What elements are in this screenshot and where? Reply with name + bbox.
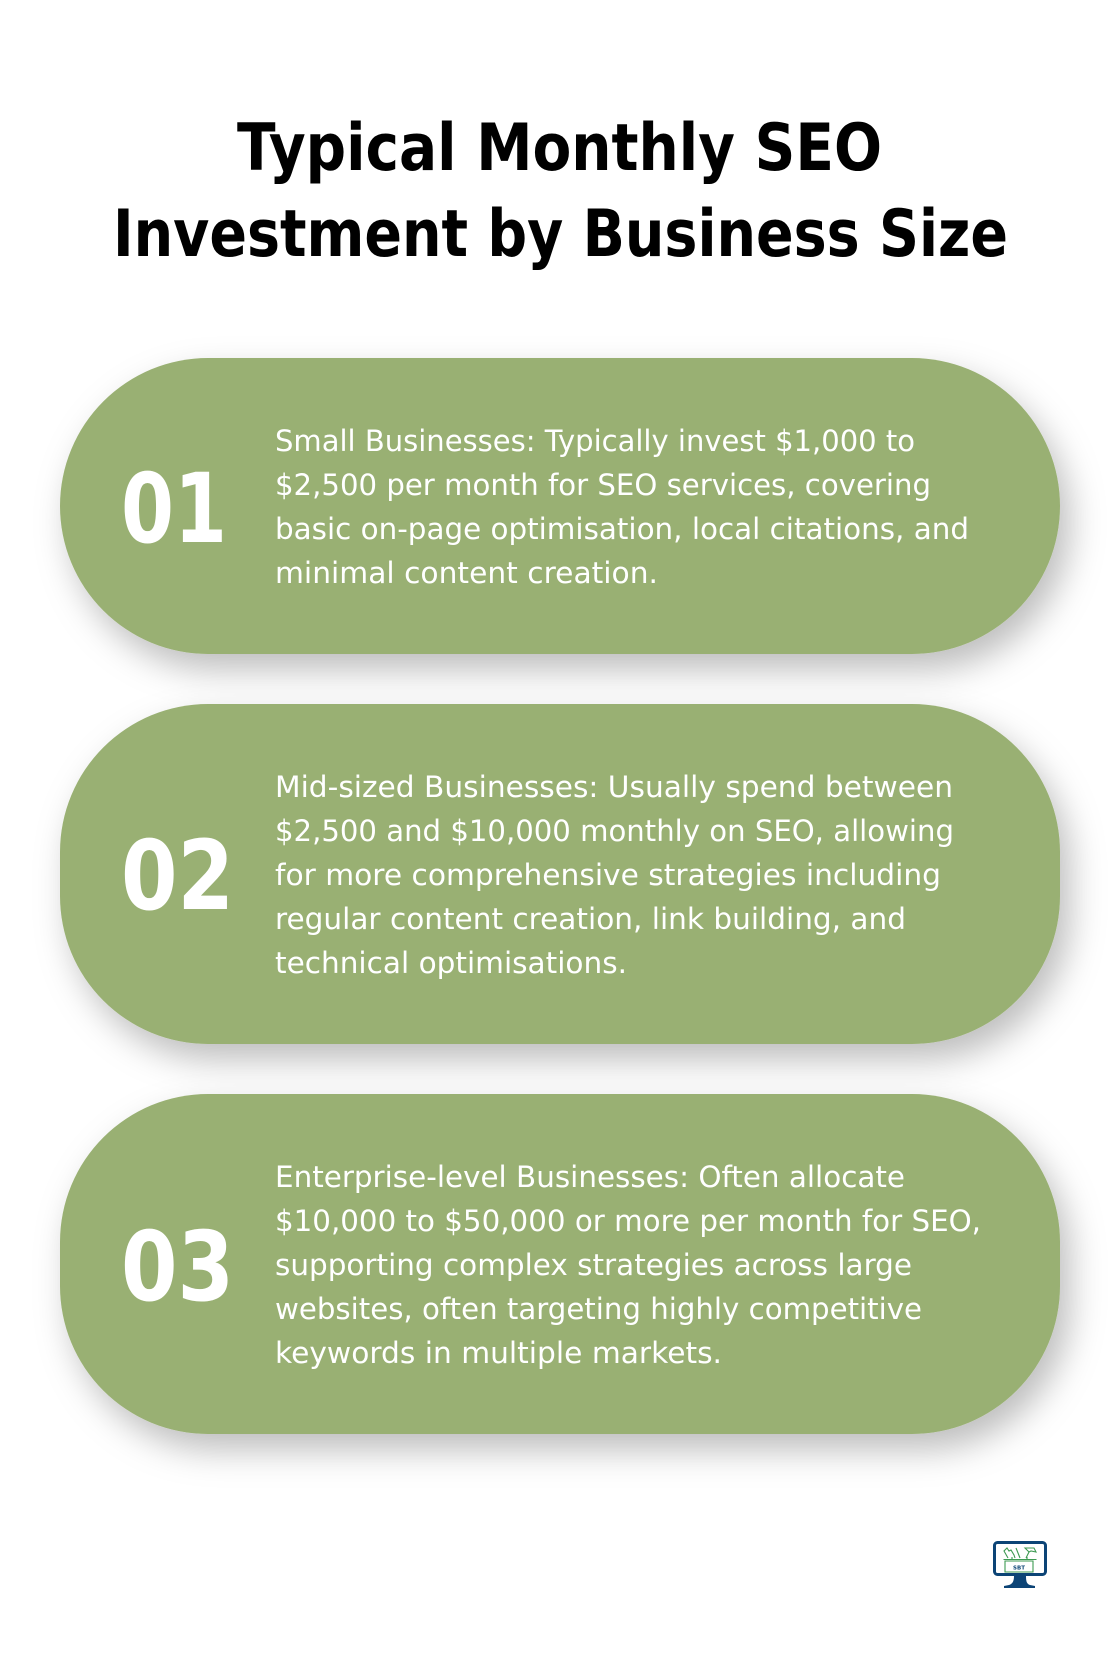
text: enterprise-level businesses description: $10,000 to $50,000 or more per month for SEO, xyxy=(275,1204,981,1238)
icon: monitor with toolbox logo: SBT xyxy=(1013,1566,1025,1572)
text: mid-sized businesses description: regular content creation, link building, and xyxy=(275,902,906,936)
text: enterprise-level businesses description: websites, often targeting highly competitive xyxy=(275,1292,922,1326)
text: enterprise-level businesses description: keywords in multiple markets. xyxy=(275,1336,722,1370)
text: mid-sized businesses description: $2,500 and $10,000 monthly on SEO, allowing xyxy=(275,814,954,848)
panel: mid-sized businesses xyxy=(60,704,1060,1044)
text: small businesses description: basic on-page optimisation, local citations, and xyxy=(275,512,969,546)
title: Typical Monthly SEO xyxy=(237,111,882,186)
panel: enterprise-level businesses xyxy=(60,1094,1060,1434)
text: enterprise-level businesses description: Enterprise-level Businesses: Often allocate xyxy=(275,1160,905,1194)
panel: small businesses xyxy=(60,358,1060,654)
text: small businesses description: Small Businesses: Typically invest $1,000 to xyxy=(275,424,915,458)
text: mid-sized businesses description: Mid-sized Businesses: Usually spend between xyxy=(275,770,953,804)
number 02: 02 xyxy=(121,820,234,932)
pill background 1 xyxy=(60,358,1060,654)
text: enterprise-level businesses description: supporting complex strategies across large xyxy=(275,1248,912,1282)
text: small businesses description: $2,500 per month for SEO services, covering xyxy=(275,468,931,502)
text: mid-sized businesses description: for more comprehensive strategies including xyxy=(275,858,941,892)
icon: monitor with toolbox logo xyxy=(994,1542,1046,1588)
number 03: 03 xyxy=(121,1211,234,1323)
pill background 2 xyxy=(60,704,1060,1044)
text: small businesses description: minimal content creation. xyxy=(275,556,658,590)
pill background 3 xyxy=(60,1094,1060,1434)
text: mid-sized businesses description xyxy=(275,770,954,980)
text: small businesses description xyxy=(275,424,969,590)
text: mid-sized businesses description: technical optimisations. xyxy=(275,946,627,980)
title xyxy=(113,111,1008,272)
text: enterprise-level businesses description xyxy=(275,1160,981,1370)
number 01: 01 xyxy=(121,453,227,565)
